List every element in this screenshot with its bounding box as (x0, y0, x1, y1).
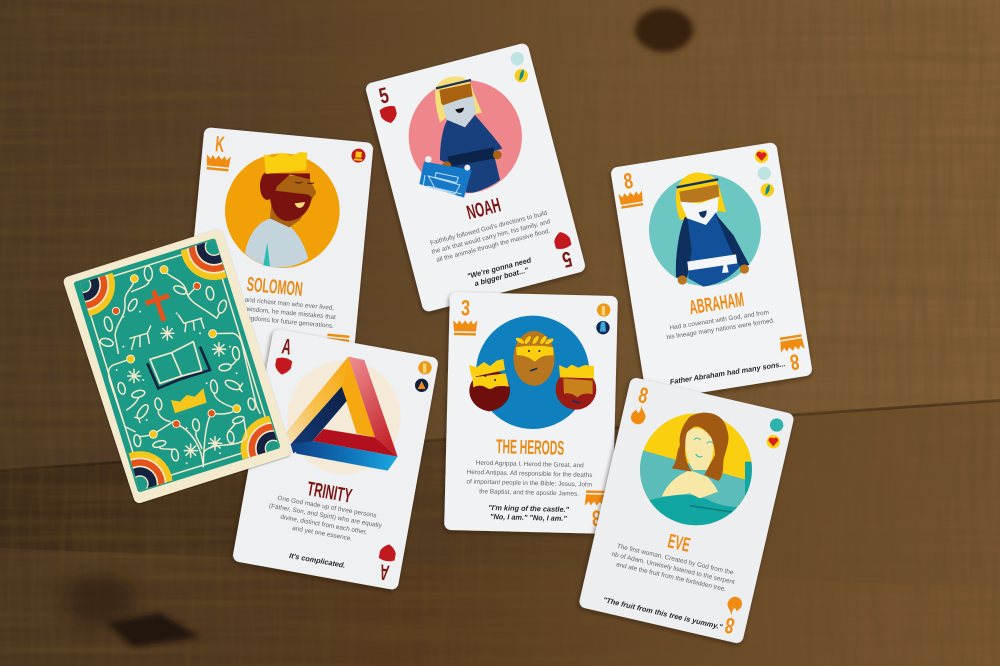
card text: Abraham: 8 (788, 349, 801, 375)
card text: Noah: 5 (376, 82, 391, 109)
card: The Herods (444, 292, 618, 534)
card text: Eve: 8 (636, 382, 650, 409)
card text: Trinity: divine, distinct from each other, (280, 514, 368, 536)
card text: Abraham: 8 (622, 168, 635, 194)
card text: Eve: and ate the fruit from the forbidden tree. (615, 561, 727, 593)
card text: Trinity (240, 333, 431, 586)
impossible triangle artwork (286, 357, 432, 474)
card text: Solomon (190, 130, 368, 351)
portrait: Noah (409, 52, 528, 198)
card text: The Herods: 3 (461, 295, 470, 320)
card text: Noah: all the animals through the massive flood. (435, 227, 551, 264)
card text: Solomon: K (214, 131, 226, 157)
card text: The Herods: 8 (592, 506, 601, 531)
card text: Noah: "We're gonna need (466, 255, 533, 281)
card text: Noah (373, 47, 578, 308)
card text: The Herods (448, 295, 614, 531)
card text: Noah: Faithfully followed God's directions to build (430, 210, 548, 247)
card text: Trinity: (Father, Son, and Spirit) who are equally (268, 503, 383, 530)
portrait: The Herods (469, 303, 610, 429)
card text: Solomon: The wisest and richest man who ever lived, (212, 294, 335, 312)
icon: crown (171, 388, 207, 413)
card text: Solomon: SOLOMON (246, 274, 304, 301)
card text: Eve: "The fruit from this tree is yummy." (602, 595, 724, 632)
card text: Trinity: TRINITY (305, 478, 354, 508)
leaves (99, 266, 256, 461)
icon: animals (130, 315, 204, 349)
card: Solomon (182, 127, 374, 378)
icon: cross (146, 291, 169, 321)
card text: The Herods: THE HERODS (496, 436, 564, 460)
card text: Eve: rib of Adam. Unwisely listened to the serpent (611, 551, 736, 586)
card: Eve (578, 377, 795, 644)
card text: Abraham (614, 145, 809, 398)
card text: Noah: 5 (560, 246, 575, 273)
card text: The Herods: Herod Agrippa I, Herod the Great, and (476, 460, 584, 469)
card text: Trinity: and yet one essence. (292, 525, 353, 543)
card text: The Herods: Herod Antipas. All responsible for the deaths (467, 469, 592, 479)
icon: open book (147, 342, 210, 388)
card text: Trinity: A (378, 559, 391, 586)
card text: Trinity: One God made up of three persons (277, 495, 377, 520)
card text: Trinity: A (280, 333, 293, 360)
yellow and orange dots (112, 266, 241, 438)
small dots (116, 276, 238, 464)
fish (135, 378, 243, 423)
card text: Eve: 8 (723, 612, 737, 639)
card text: Trinity: It's complicated. (289, 551, 346, 570)
card: Noah (364, 42, 587, 313)
rainbow corners (64, 229, 291, 504)
frame line (82, 245, 273, 484)
card text: The Herods: "No, I am." "No, I am." (490, 512, 567, 523)
card text: Solomon: harmed his kingdoms for future generations. (209, 311, 334, 330)
card text: Noah: a bigger boat..." (473, 265, 530, 288)
portrait: Abraham (649, 150, 774, 287)
portrait: Eve (638, 412, 783, 528)
card text: Noah: NOAH (465, 195, 503, 224)
card back: teal pattern (62, 229, 292, 504)
card text: The Herods: of important people in the Bible: Jesus, John (466, 478, 593, 489)
card text: Eve: The first woman. Created by God from the (616, 543, 735, 577)
card text: Eve: EVE (666, 530, 692, 557)
icon: snowflake stars (128, 327, 226, 457)
card text: The Herods: the Baptist, and the apostle James. (479, 488, 579, 498)
card text: Abraham: Had a covenant with God, and from (669, 309, 769, 332)
card: Trinity (232, 328, 439, 591)
vines (109, 270, 260, 467)
card text: Abraham: Father Abraham had many sons... (669, 359, 786, 386)
card text: Solomon: yet for all his wisdom, he made mistakes that (209, 302, 336, 321)
portrait: Solomon (225, 152, 340, 268)
card text: Eve (587, 382, 786, 639)
card: Abraham (610, 142, 813, 401)
card text: Abraham: his lineage many nations were formed. (666, 317, 775, 341)
card text: Abraham: ABRAHAM (688, 289, 746, 319)
card text: Noah: the ark that would carry him, his family, and (431, 218, 552, 256)
card text: The Herods: "I'm king of the castle." (488, 503, 570, 514)
